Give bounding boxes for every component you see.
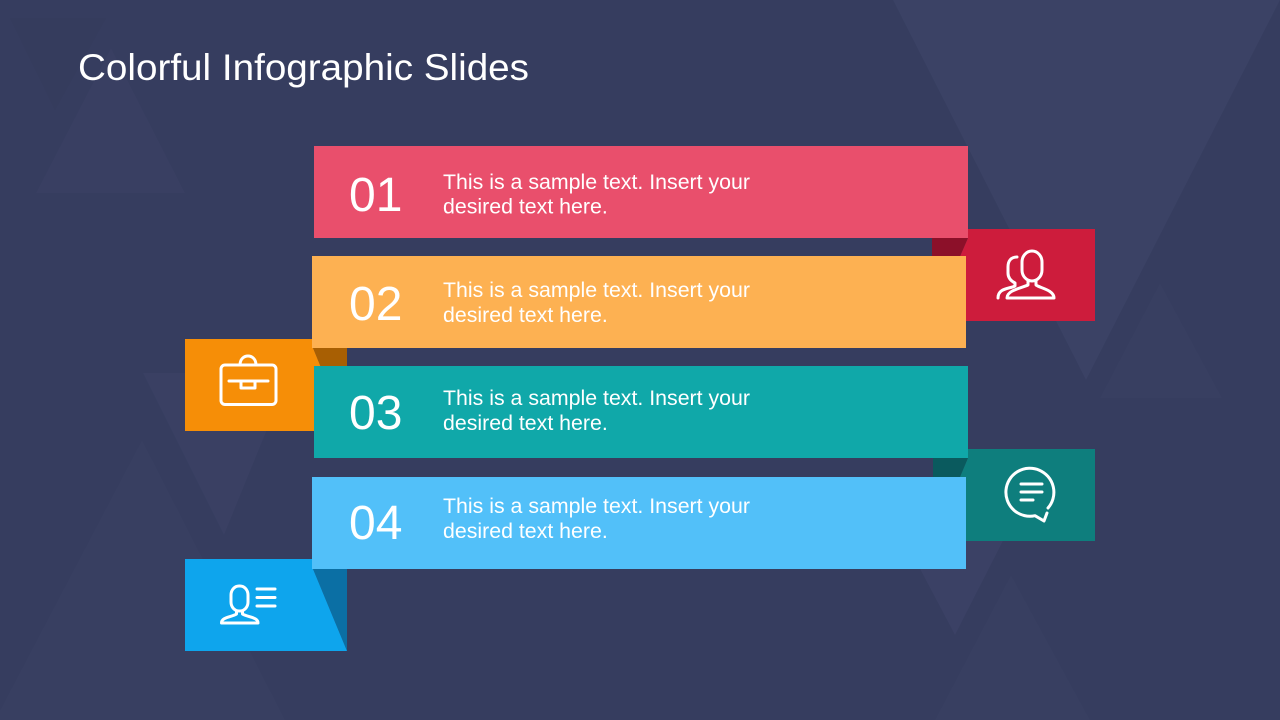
- text block 03: desired text here.: [443, 411, 608, 435]
- tab: briefcase icon, orange: [185, 339, 347, 431]
- panel: item 03: [314, 366, 968, 458]
- text block 02: desired text here.: [443, 303, 608, 327]
- text block 04: This is a sample text. Insert your: [443, 494, 750, 518]
- tab: chat bubble icon, teal: [933, 449, 1095, 541]
- number 04: 04: [349, 497, 402, 550]
- text block 02: This is a sample text. Insert your: [443, 278, 750, 302]
- text block 03: This is a sample text. Insert your: [443, 386, 750, 410]
- number 02: 02: [349, 278, 402, 331]
- text block 01: desired text here.: [443, 194, 608, 218]
- tab: profile icon, blue: [185, 559, 347, 651]
- number 03: 03: [349, 387, 402, 440]
- number 01: 01: [349, 169, 402, 222]
- text block 01: This is a sample text. Insert your: [443, 170, 750, 194]
- panel: item 04: [312, 477, 966, 569]
- panel: item 01: [314, 146, 968, 238]
- title: Colorful Infographic Slides: [78, 47, 529, 88]
- icon: briefcase: [221, 356, 276, 404]
- icon: two people: [998, 251, 1054, 298]
- tab: people icon, red: [932, 229, 1095, 321]
- text block 04: desired text here.: [443, 519, 608, 543]
- icon: person with list: [222, 586, 275, 623]
- panel: item 02: [312, 256, 966, 348]
- icon: speech bubble: [1006, 468, 1054, 521]
